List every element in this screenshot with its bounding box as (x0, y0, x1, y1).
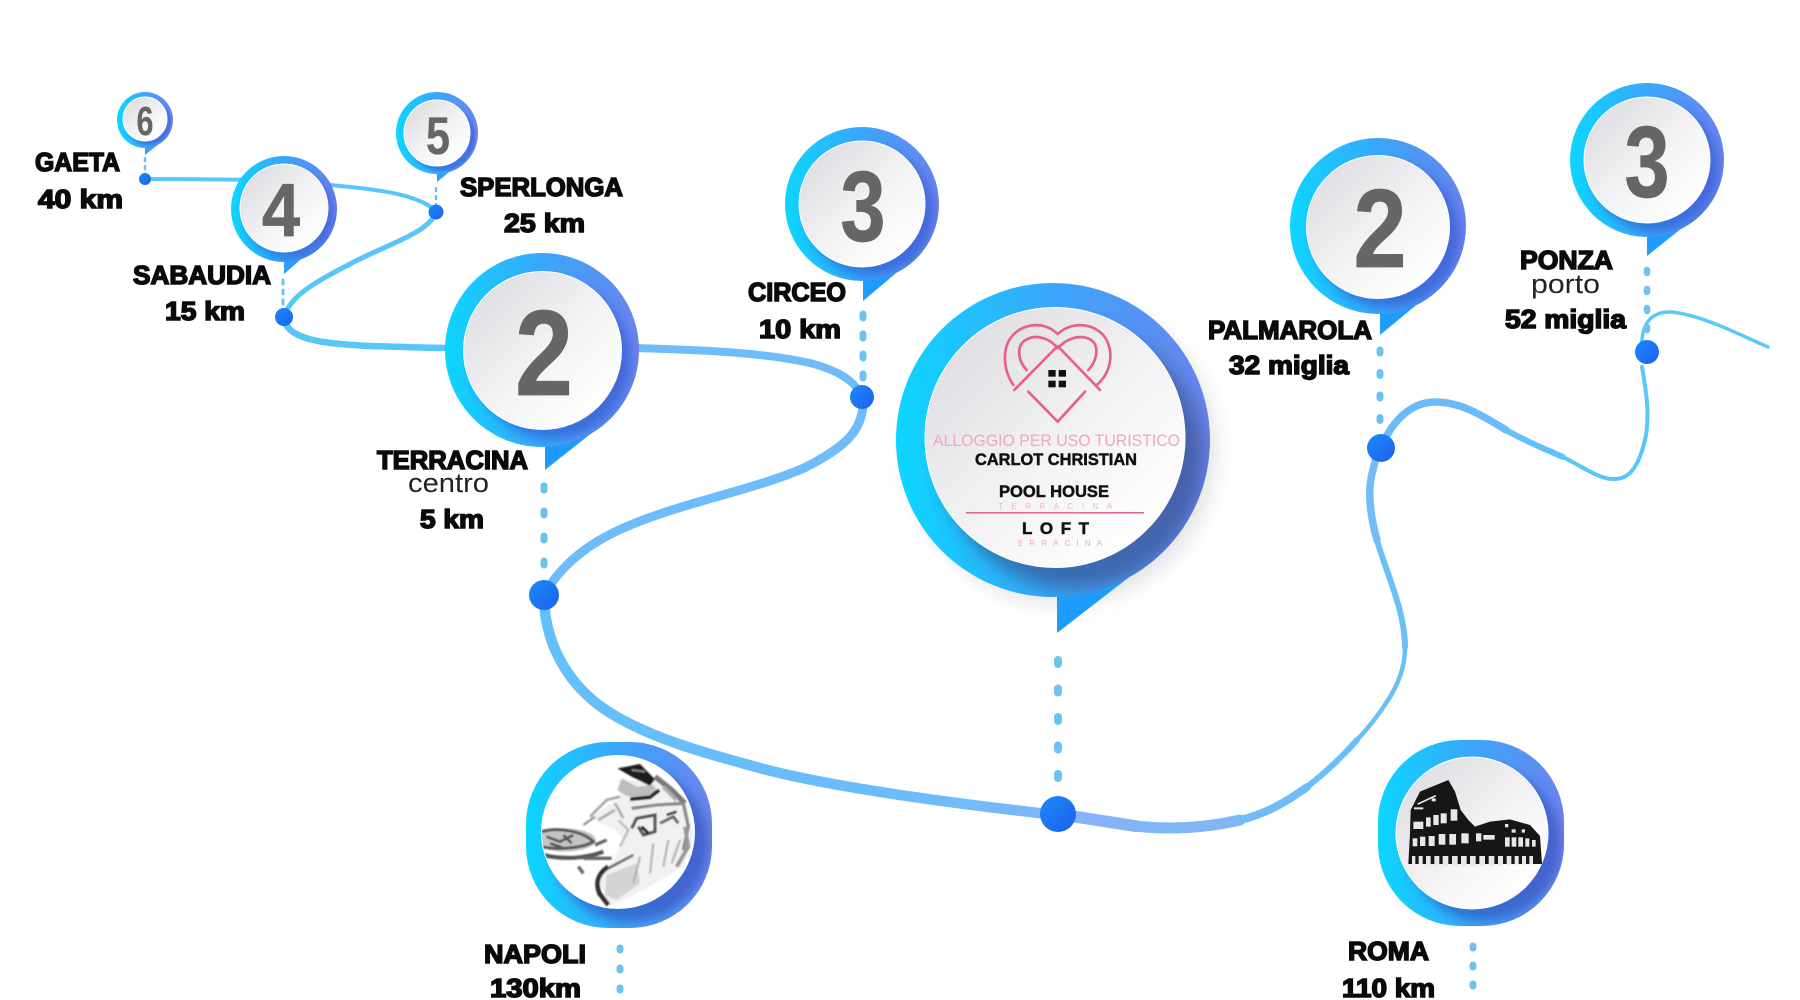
label: Circeo (748, 277, 846, 344)
label: Napoli (484, 939, 586, 1000)
label: Sabaudia: SABAUDIA (133, 260, 271, 290)
pin: 4 Sabaudia: 4 (262, 168, 300, 252)
text: pool house location: TERRACINA (998, 502, 1113, 511)
pin: 5 Sperlonga (396, 92, 478, 182)
pin: 6 Gaeta (117, 92, 173, 155)
pin: 6 Gaeta: 6 (136, 98, 154, 144)
pin: 3 Circeo: 3 (840, 151, 886, 263)
label: Palmarola: 32 miglia (1229, 350, 1350, 380)
label: Circeo: 10 km (759, 314, 841, 344)
pin: 2 Palmarola (1290, 138, 1466, 335)
text: loft location: ERRACINA (1018, 539, 1103, 548)
text: accommodation type: ALLOGGIO PER USO TURISTICO (933, 431, 1180, 450)
route line (145, 179, 1768, 828)
label: Gaeta: 40 km (38, 184, 123, 214)
label: Ponza (1505, 245, 1627, 334)
pin: 2 Terracina: 2 (515, 285, 573, 421)
label: Roma (1342, 936, 1435, 1000)
badge: Roma (1378, 740, 1564, 926)
route stop dots (139, 173, 1659, 832)
label: Terracina: 5 km (420, 504, 484, 534)
label: Ponza: porto (1531, 269, 1600, 299)
label: Terracina: centro (408, 468, 489, 498)
pin: 3 Circeo (785, 127, 939, 301)
label: Ponza: PONZA (1520, 245, 1613, 275)
icon: pizza chef (534, 764, 694, 907)
icon: colosseum (1408, 780, 1542, 866)
label: Gaeta: GAETA (35, 147, 120, 177)
label: Ponza: 52 miglia (1505, 304, 1627, 334)
pin: 2 Terracina (445, 253, 639, 470)
label: Circeo: CIRCEO (748, 277, 846, 307)
text: loft: LOFT (1022, 519, 1090, 538)
label: Sperlonga: 25 km (504, 208, 585, 238)
pin: main accommodation (896, 283, 1217, 633)
pin: 3 Ponza: 3 (1624, 107, 1670, 219)
label: Roma: ROMA (1348, 936, 1429, 966)
label: Terracina: TERRACINA (377, 445, 528, 475)
label: Sabaudia (133, 260, 271, 326)
text: pool house: POOL HOUSE (999, 482, 1109, 501)
icon: heart house logo (1005, 325, 1110, 422)
label: Sabaudia: 15 km (165, 296, 245, 326)
pin: 2 Palmarola: 2 (1354, 167, 1406, 291)
label: Sperlonga (460, 172, 623, 238)
label: Palmarola (1208, 315, 1372, 380)
label: Palmarola: PALMAROLA (1208, 315, 1372, 345)
label: Terracina (377, 445, 528, 534)
badge: Napoli (526, 742, 712, 928)
label: Napoli: NAPOLI (484, 939, 586, 969)
pin: 4 Sabaudia (231, 156, 337, 274)
label: Sperlonga: SPERLONGA (460, 172, 623, 202)
pin: 3 Ponza (1570, 83, 1724, 256)
pin: 5 Sperlonga: 5 (426, 107, 450, 166)
text: owner name: CARLOT CHRISTIAN (975, 450, 1137, 469)
dotted connectors (145, 158, 1647, 995)
label: Gaeta (35, 147, 123, 214)
